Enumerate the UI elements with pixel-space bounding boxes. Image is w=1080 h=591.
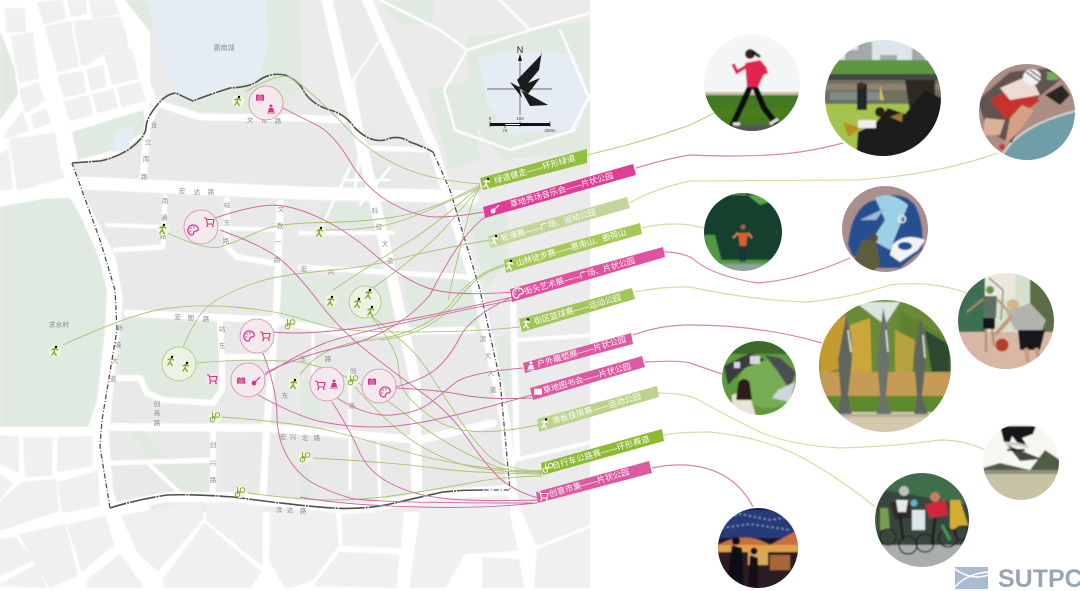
road and place names: 东 <box>224 218 231 227</box>
boundary line <box>72 74 510 508</box>
label: lawn library: 草地图书会——片状公园 <box>542 361 632 395</box>
road and place names: 宏 <box>280 432 287 441</box>
photo: street basketball <box>958 273 1054 369</box>
lakes <box>112 0 589 152</box>
road and place names: 科 <box>372 206 379 215</box>
compass and scale bar: 0 <box>489 116 492 121</box>
label: greenway walk <box>480 149 587 190</box>
road and place names: 南 <box>143 154 150 163</box>
road and place names: 路 <box>275 116 282 125</box>
road and place names: 城 <box>115 341 122 349</box>
compass and scale bar: N <box>517 45 523 55</box>
label: street art: 街头艺术展——广场、片状公园 <box>523 255 636 296</box>
road and place names: 东 <box>282 391 289 400</box>
label: skateboard <box>537 386 659 432</box>
road and place names: 图 <box>188 314 194 322</box>
base map <box>0 0 600 591</box>
marker: green walking and cycling icons <box>49 95 359 498</box>
road and place names: 教 <box>277 221 284 230</box>
road and place names: 路 <box>208 187 215 196</box>
road and place names: 宏 <box>179 186 186 195</box>
road and place names: 路 <box>203 314 210 323</box>
road and place names: 新 <box>117 323 124 332</box>
map activity markers <box>49 86 396 498</box>
road and place names: 创 <box>154 399 160 408</box>
photo: lawn concert <box>825 40 941 156</box>
road and place names: 路 <box>325 354 332 363</box>
road and place names: 高 <box>154 408 161 417</box>
road and place names: 兴 <box>210 458 217 467</box>
label: cycling: 自行车公路赛——环形赛道 <box>551 433 651 471</box>
road and place names: 兴 <box>328 267 335 276</box>
label: skateboard: 滑板极限赛——运动公园 <box>551 391 642 426</box>
road and place names: 北 <box>302 434 309 442</box>
label: mountain hike: 山林徒步赛——惠南山、嵌荷山 <box>515 227 627 268</box>
photo: 3D street art <box>840 185 930 275</box>
outer city blocks <box>0 1 600 591</box>
road and place names: 大 <box>382 239 389 248</box>
road and place names <box>48 43 497 515</box>
activity labels <box>480 149 665 503</box>
road and place names: 路 <box>160 231 167 240</box>
photo: forest trail runner <box>704 193 782 271</box>
photo: sculpture park <box>815 298 955 436</box>
road and place names: 化 <box>261 115 268 124</box>
marker: pink event circles <box>184 86 396 403</box>
green spaces <box>0 0 600 495</box>
green connector lines on map <box>63 76 542 500</box>
road and place names: 路 <box>274 255 281 264</box>
road and place names: 创 <box>210 440 216 449</box>
label: cycling <box>541 429 664 475</box>
road and place names: 兴 <box>290 432 297 441</box>
road and place names: 路 <box>314 433 321 442</box>
road and place names: 路 <box>141 172 148 181</box>
label: lawn concert: 草地秀场音乐会——片状公园 <box>509 170 614 209</box>
label: creative market <box>536 461 652 503</box>
road and place names: 道 <box>490 385 497 394</box>
road and place names: 道 <box>387 256 394 265</box>
marker: green event circles <box>162 286 381 381</box>
watermark: SUTPC logo <box>955 565 1080 591</box>
road and place names: 达 <box>287 505 294 514</box>
road and place names: 惠南湖 <box>214 43 234 52</box>
road and place names: 路 <box>223 236 230 245</box>
compass and scale bar <box>487 45 556 133</box>
photo: road cycling race <box>875 473 969 567</box>
road network <box>0 0 600 590</box>
road and place names: 一 <box>275 239 282 246</box>
road and place names: 大 <box>485 351 492 360</box>
road and place names: 通 <box>161 213 168 222</box>
road and place names: 路 <box>210 475 217 484</box>
road and place names: 创 <box>350 366 356 375</box>
label: lawn concert <box>483 164 636 218</box>
road and place names: 站 <box>224 200 231 209</box>
compass and scale bar: 300m <box>544 128 556 133</box>
road and place names: 南 <box>162 196 169 205</box>
road and place names: 路 <box>300 506 307 515</box>
label: creative market: 创意市集——片状公园 <box>548 466 630 499</box>
connectors from labels to photos <box>587 112 998 507</box>
label: mountain hike <box>504 223 642 273</box>
road and place names: 大 <box>112 356 119 365</box>
label: outdoor sculpture: 户外雕塑展——片状公园 <box>536 334 627 369</box>
road and place names: 求水岭 <box>48 320 70 329</box>
photo: inline skaters <box>979 64 1075 160</box>
photo: skateboard jump <box>983 424 1059 500</box>
photo: night market <box>718 508 798 588</box>
road and place names: 文 <box>278 204 285 213</box>
label: street art <box>510 247 665 302</box>
road and place names: 技 <box>376 222 383 231</box>
photo: lawn reading circle <box>722 341 796 415</box>
label: street basketball <box>519 288 635 332</box>
road and place names: 宏 <box>175 312 182 321</box>
road and place names: 文 <box>247 115 254 124</box>
road and place names: 合 <box>151 120 158 129</box>
label: roller skating: 轮滑赛——广场、运动公园 <box>500 207 597 243</box>
road and place names: 新 <box>349 401 356 410</box>
road and place names: 滨 <box>480 334 487 343</box>
label: roller skating <box>488 197 630 248</box>
road and place names: 站 <box>219 324 226 333</box>
label: lawn library <box>530 356 645 400</box>
road and place names: 宏 <box>301 264 308 273</box>
label: street basketball: 街区篮球赛——运动公园 <box>533 292 622 326</box>
road and place names: 路 <box>154 418 161 427</box>
road and place names: 滨 <box>276 505 283 514</box>
road and place names: 大 <box>488 368 495 377</box>
compass and scale bar: 75 <box>502 128 508 133</box>
photo: runner on grass <box>704 35 800 131</box>
pink connector lines on map <box>215 108 538 508</box>
road and place names: 东 <box>300 354 307 363</box>
compass and scale bar: 150 <box>516 116 524 121</box>
road and place names: 达 <box>194 187 201 196</box>
road and place names: 立 <box>145 137 152 146</box>
label: greenway walk: 绿道健走——环形绿道 <box>493 153 576 185</box>
road and place names: 东 <box>219 341 226 350</box>
road and place names: 道 <box>110 374 117 383</box>
